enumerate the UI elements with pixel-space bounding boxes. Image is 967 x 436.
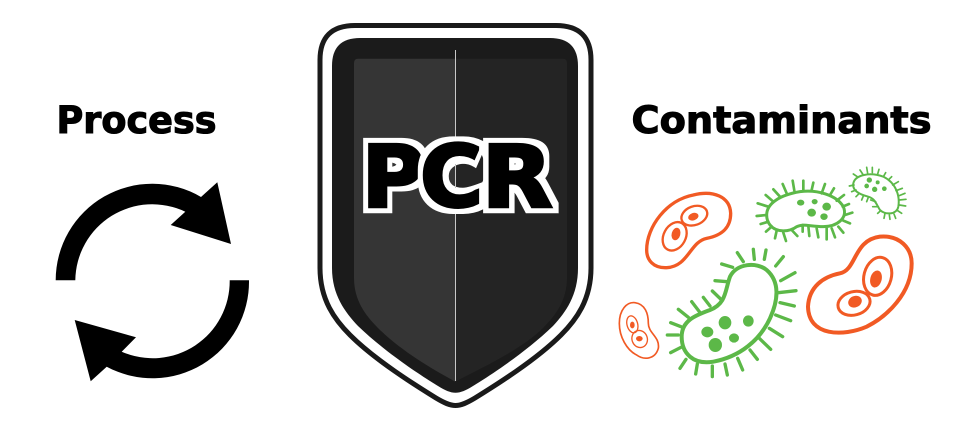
- badge text: PCR: R: [482, 127, 553, 228]
- microbe: green large centre: [667, 249, 796, 377]
- microbe: green small top right: [849, 167, 906, 219]
- badge text: PCR: C: [420, 128, 483, 228]
- shield outer outline: [320, 26, 591, 406]
- illustration: contaminants microbes: [619, 167, 912, 377]
- microbe: orange upper left: [647, 193, 731, 268]
- microbe: green medium top: [757, 181, 852, 241]
- microbe: orange small lower left: [619, 303, 658, 358]
- shield right panel: [455, 59, 567, 382]
- badge text: PCR: P: [362, 128, 425, 228]
- heading: Contaminants: Contaminants: [632, 98, 932, 142]
- lower arrow: [75, 280, 249, 381]
- shield centre line: [454, 50, 456, 381]
- shield left panel: [354, 59, 455, 382]
- icon: cycle arrows: [56, 182, 249, 381]
- badge text: PCR: [362, 127, 553, 228]
- upper arrow: [56, 182, 231, 280]
- heading: Process: Process: [56, 98, 216, 142]
- shield: PCR badge: [320, 26, 591, 406]
- shield dark body: [332, 38, 578, 393]
- microbe: orange large right: [808, 237, 912, 333]
